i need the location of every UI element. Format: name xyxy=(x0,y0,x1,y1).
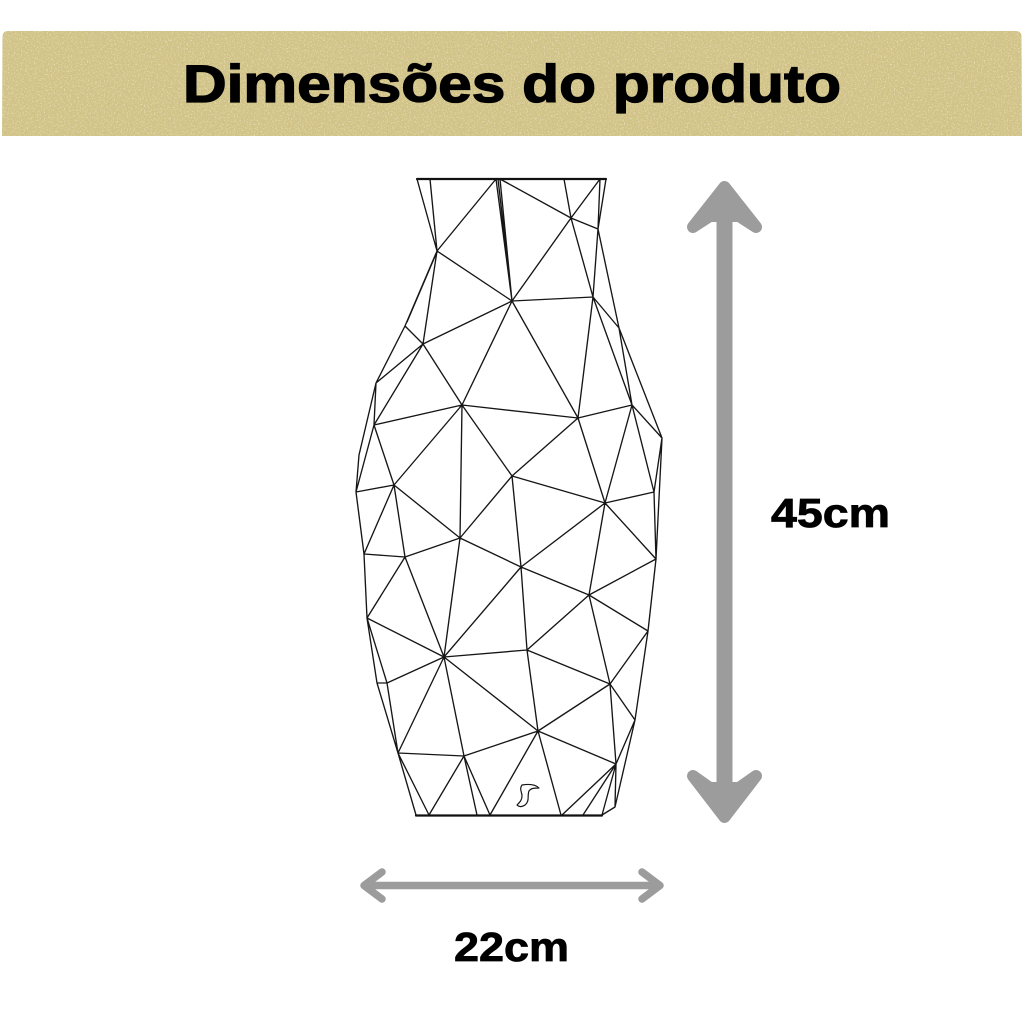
vase wireframe illustration xyxy=(356,179,662,816)
label: width: 22cm xyxy=(454,924,569,970)
label: height: 45cm xyxy=(771,490,890,536)
vase rim xyxy=(417,178,606,180)
arrow: height dimension xyxy=(693,187,756,817)
title: Dimensões do produto xyxy=(183,55,841,114)
icon: vase logo xyxy=(517,784,539,806)
vase base xyxy=(416,814,602,817)
header banner xyxy=(2,31,1022,136)
arrow: width dimension xyxy=(364,872,660,899)
